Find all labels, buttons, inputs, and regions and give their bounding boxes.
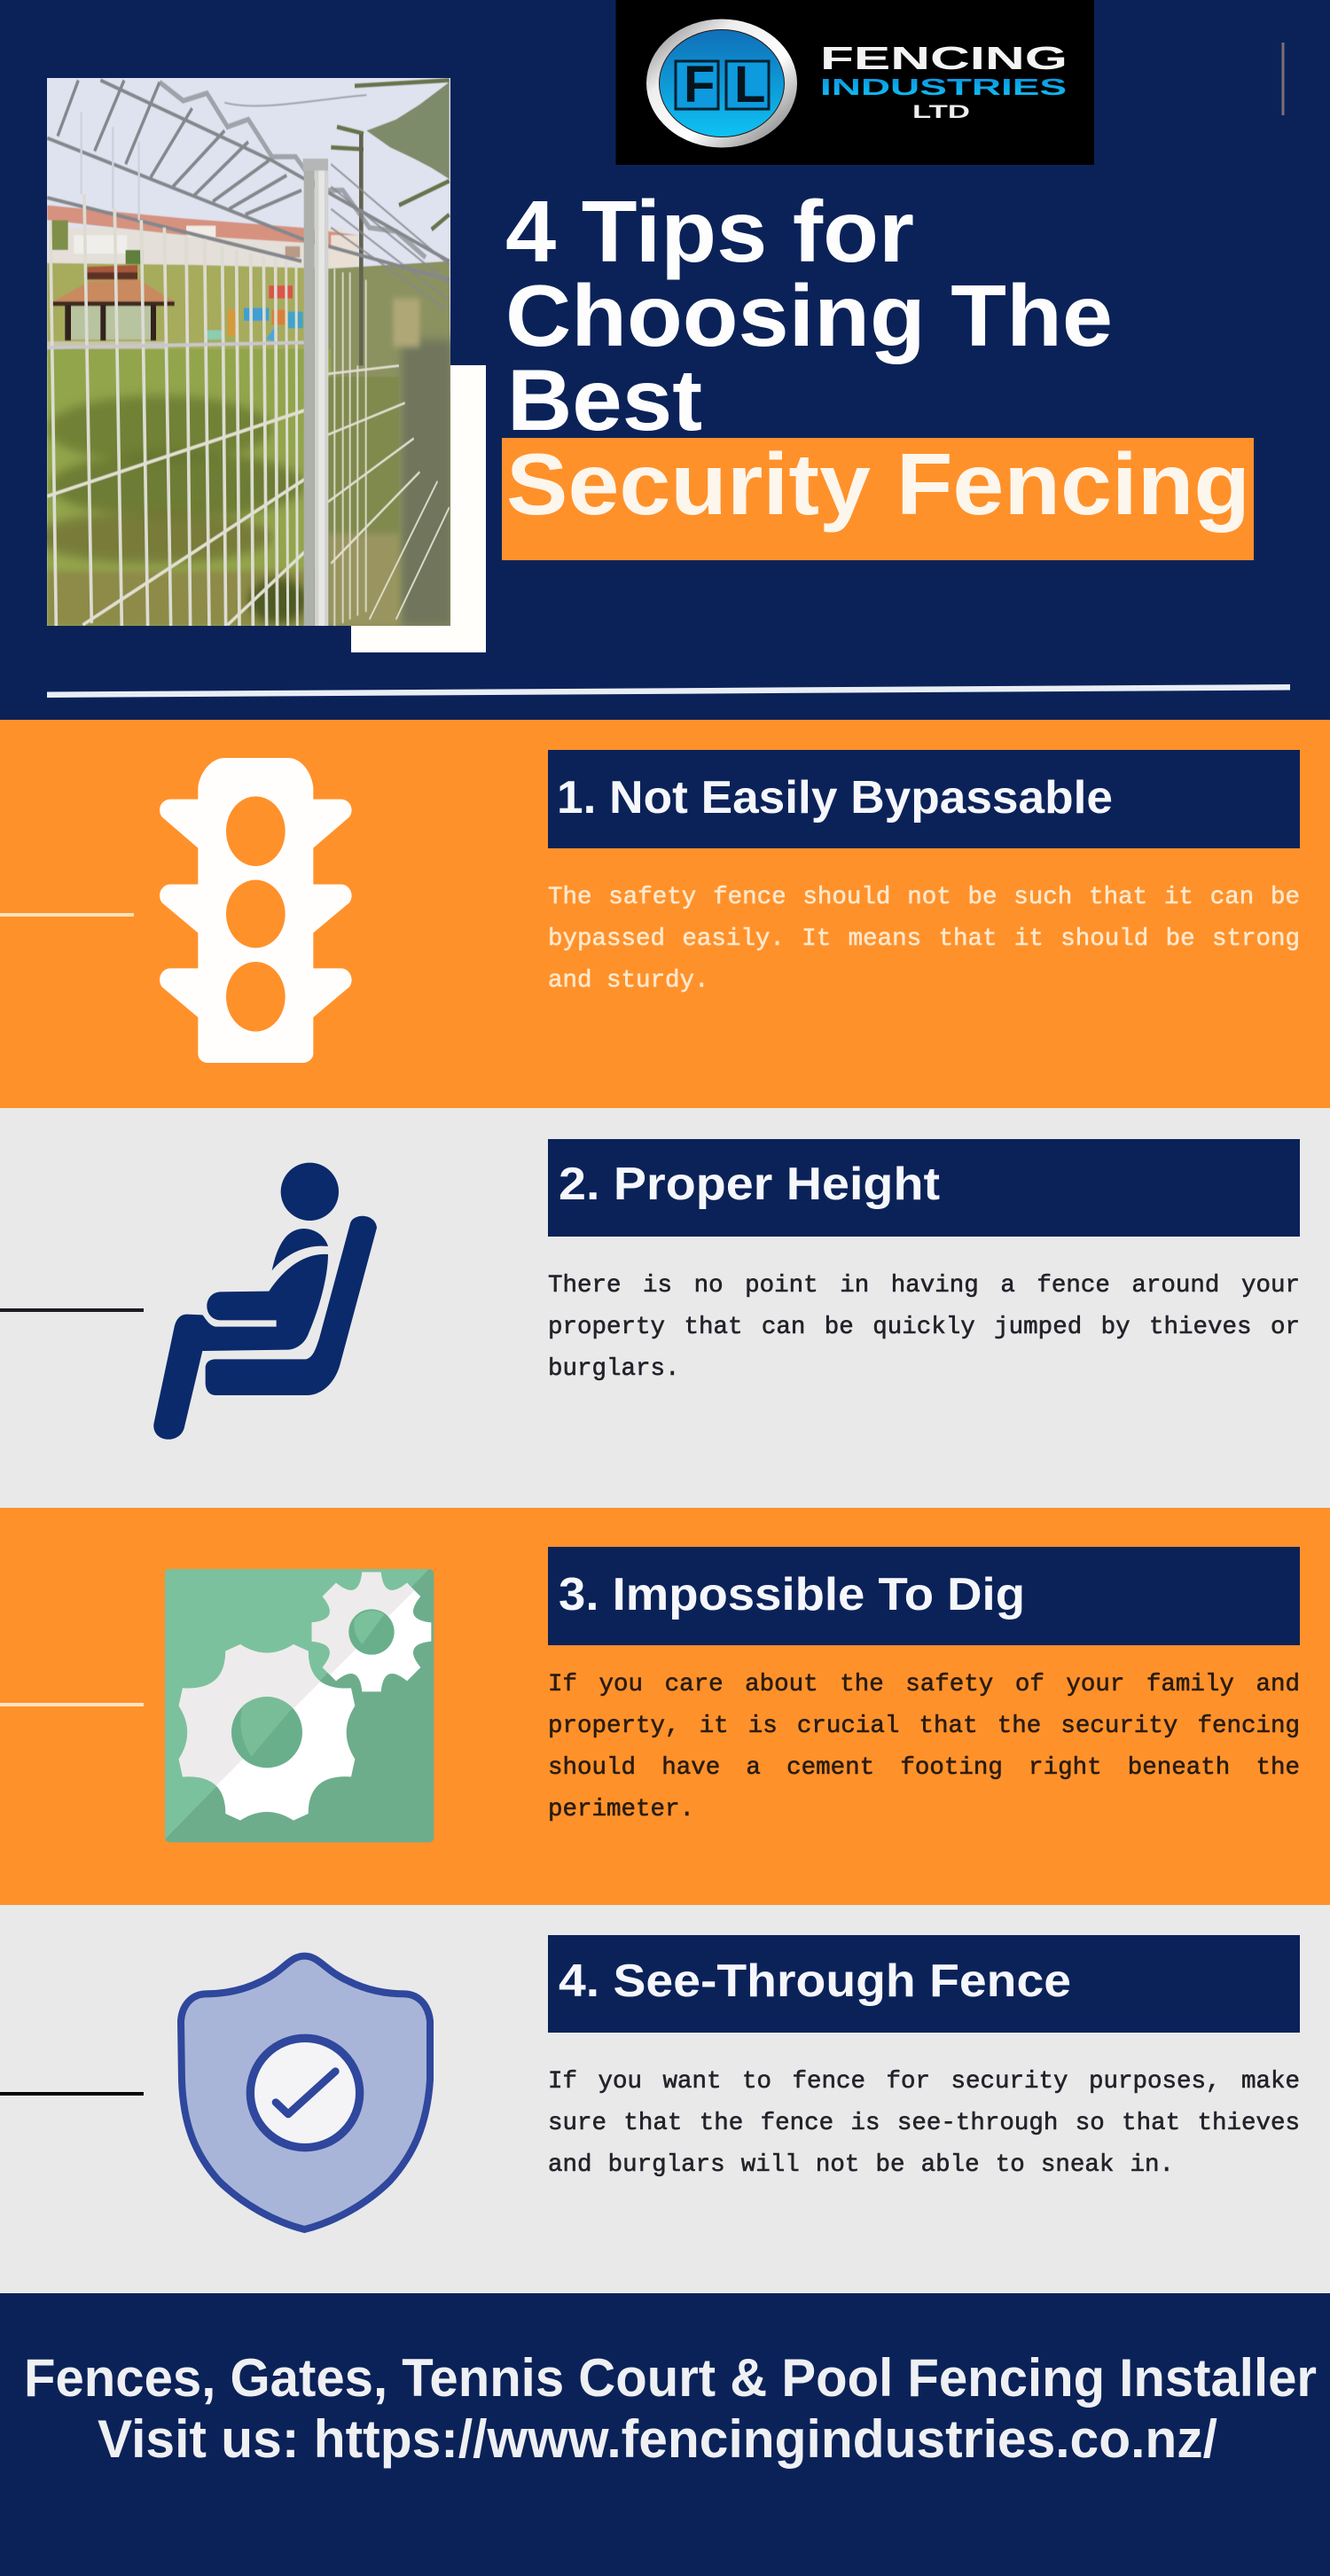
body text: tip 2: burglars. xyxy=(548,1355,680,1383)
icon: seated person xyxy=(153,1163,377,1440)
panel: footer xyxy=(0,2293,1330,2576)
logo emblem: L xyxy=(734,56,765,113)
large gear xyxy=(179,1644,355,1821)
logo emblem: F xyxy=(684,56,715,113)
posts xyxy=(304,160,315,627)
body text: tip 3: If you care about the safety of your family and xyxy=(548,1671,1300,1698)
title: 4 Tips for xyxy=(505,183,914,280)
body text: tip 4: If you want to fence for security purposes, make xyxy=(548,2068,1300,2096)
panel: header xyxy=(0,0,1330,720)
title: Choosing The xyxy=(505,267,1113,364)
body text: tip 2: property that can be quickly jumped by thieves or xyxy=(548,1314,1300,1341)
body text: tip 3: property, it is crucial that the security fencing xyxy=(548,1713,1300,1740)
footer call to action xyxy=(24,2348,1317,2469)
body text: tip 4: and burglars will not be able to sneak in. xyxy=(548,2151,1174,2179)
body text: tip 3: perimeter. xyxy=(548,1796,694,1823)
far right darker hedge xyxy=(328,262,452,627)
logo xyxy=(615,0,1094,165)
lawn xyxy=(47,349,331,627)
heading: tip 3 xyxy=(548,1547,1300,1645)
heading: tip 3: 3. Impossible To Dig xyxy=(559,1569,1025,1620)
fence verticals xyxy=(51,112,366,627)
body text: tip 2: There is no point in having a fence around your xyxy=(548,1272,1300,1300)
white photo backing block xyxy=(351,365,486,652)
houses xyxy=(47,228,343,269)
playground xyxy=(207,285,303,341)
fence rails xyxy=(47,342,450,625)
logo wordmark: LTD xyxy=(912,102,970,122)
heading: tip 2 xyxy=(548,1139,1300,1237)
body text: tip 1: and sturdy. xyxy=(548,967,709,995)
body text: tip 1: bypassed easily. It means that it should be strong xyxy=(548,925,1300,953)
panel: tip 3 xyxy=(0,1508,1330,1905)
title highlight: security fencing: Security Fencing xyxy=(506,435,1250,533)
logo wordmark: INDUSTRIES xyxy=(820,74,1067,100)
hill xyxy=(47,263,450,355)
icon: shield with check xyxy=(181,1956,430,2229)
icon: gears on green tile xyxy=(165,1569,434,1842)
logo wordmark xyxy=(820,40,1068,122)
body text: tip 3: should have a cement footing right beneath the xyxy=(548,1754,1300,1782)
icon: traffic light xyxy=(160,758,352,1063)
tree xyxy=(331,81,450,230)
small gear xyxy=(312,1573,431,1691)
heading: tip 4: 4. See-Through Fence xyxy=(559,1955,1071,2007)
title xyxy=(505,183,1113,449)
heading: tip 1: 1. Not Easily Bypassable xyxy=(557,772,1113,824)
photo: security fence around a park xyxy=(35,74,458,630)
footer call to action: Visit us: https://www.fencingindustries.co.nz/ xyxy=(98,2409,1217,2469)
panel: tip 4 xyxy=(0,1905,1330,2293)
body text: tip 1 xyxy=(548,884,1300,995)
body text: tip 4 xyxy=(548,2068,1300,2179)
logo wordmark: FENCING xyxy=(820,40,1068,76)
footer call to action: Fences, Gates, Tennis Court & Pool Fencing Installer xyxy=(24,2348,1317,2408)
panel: tip 2 xyxy=(0,1108,1330,1508)
body text: tip 3 xyxy=(548,1671,1300,1823)
body text: tip 4: sure that the fence is see-through so that thieves xyxy=(548,2110,1300,2137)
razor wire and arms xyxy=(47,81,450,309)
heading: tip 1 xyxy=(548,750,1300,848)
vertical accent mark xyxy=(1282,43,1284,115)
panel: tip 1 xyxy=(0,720,1330,1108)
gazebo xyxy=(47,265,175,349)
heading: tip 4 xyxy=(548,1935,1300,2033)
logo emblem xyxy=(646,20,797,147)
body text: tip 1: The safety fence should not be such that it can be xyxy=(548,884,1300,911)
title: Best xyxy=(507,351,702,449)
heading: tip 2: 2. Proper Height xyxy=(559,1159,940,1210)
body text: tip 2 xyxy=(548,1272,1300,1383)
